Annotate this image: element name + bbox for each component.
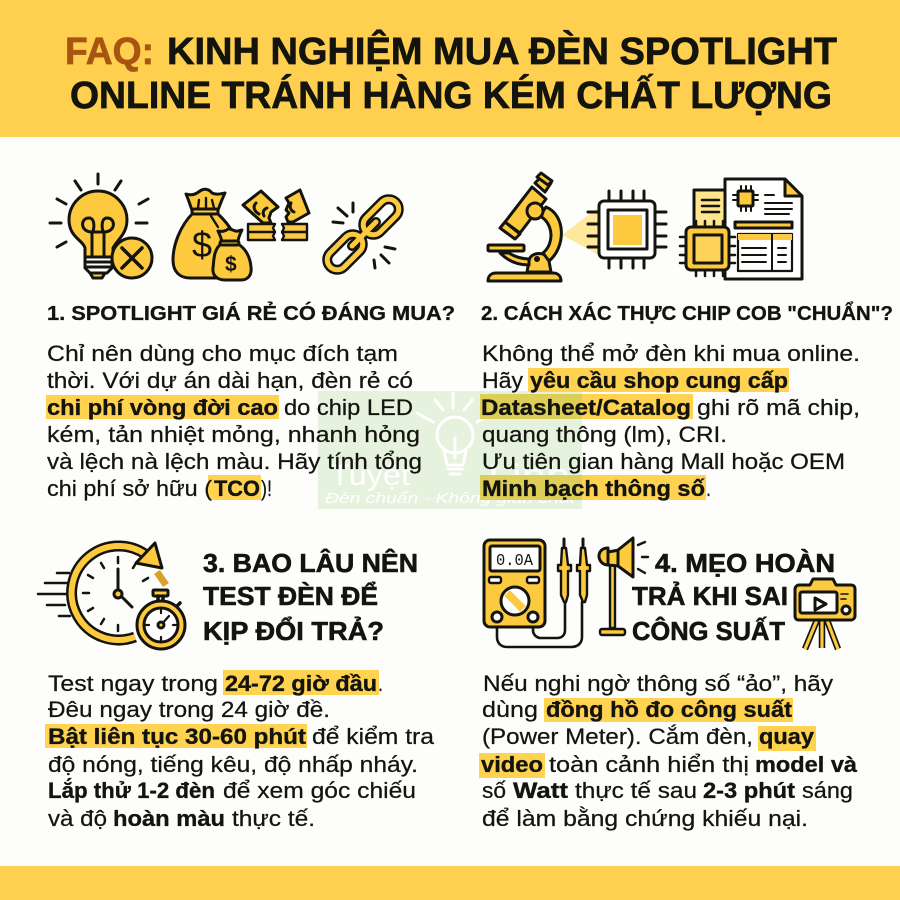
icon: broken light bulb: [50, 174, 152, 278]
text block: để kiểm tra: [312, 724, 435, 749]
watermark: Tuyệt: [330, 459, 411, 492]
heading: 3. BAO LÂU NÊN: [203, 548, 418, 578]
text block: TCO: [214, 476, 260, 501]
title banner: KINH NGHIỆM MUA ĐÈN SPOTLIGHT: [167, 29, 837, 73]
watermark: [318, 391, 582, 509]
text block: .: [706, 476, 711, 501]
heading: KỊP ĐỔI TRẢ?: [203, 616, 384, 646]
heading: CÔNG SUẤT: [632, 616, 785, 646]
title banner: ONLINE TRÁNH HÀNG KÉM CHẤT LƯỢNG: [70, 73, 832, 117]
text block: Nếu nghi ngờ thông số “ảo”, hãy: [483, 671, 833, 696]
heading: 1. SPOTLIGHT GIÁ RẺ CÓ ĐÁNG MUA?: [47, 301, 455, 325]
text block: model và: [755, 752, 858, 777]
heading: [203, 548, 418, 646]
text block: Datasheet/Catalog: [481, 395, 691, 420]
panel: question 2: [480, 173, 893, 501]
icon: microscope: [488, 173, 599, 281]
text block: 2-3 phút: [703, 778, 796, 803]
text block: dùng: [482, 697, 538, 722]
text block: thời. Với dự án dài hạn, đèn rẻ có: [47, 368, 413, 393]
text block: do chip LED: [284, 395, 413, 420]
icon: money bags and torn bills: $: [225, 253, 237, 276]
text block: [479, 671, 858, 831]
heading: [632, 548, 835, 646]
text block: sáng: [802, 778, 853, 803]
icon: multimeter with probes: [484, 539, 590, 647]
text block: (Power Meter). Cắm đèn,: [482, 724, 753, 749]
text block: chi phí vòng đời cao: [47, 395, 278, 420]
text block: kém, tản nhiệt mỏng, nhanh hỏng: [47, 422, 420, 447]
text block: số: [482, 778, 506, 803]
text block: hoàn màu: [113, 806, 225, 831]
panel: question 1: [46, 174, 455, 501]
text block: quay: [759, 724, 815, 749]
watermark: Linh: [488, 459, 570, 492]
text block: .: [378, 671, 383, 696]
title banner: FAQ:: [65, 31, 154, 73]
heading: TRẢ KHI SAI: [632, 581, 788, 611]
text block: chi phí sở hữu (: [47, 476, 213, 501]
icon: chip: [588, 191, 666, 268]
heading: 2. CÁCH XÁC THỰC CHIP COB "CHUẨN"?: [481, 302, 893, 325]
text block: và độ: [48, 806, 107, 831]
footer band: [0, 866, 900, 900]
text block: đồng hồ đo công suất: [546, 697, 793, 722]
icon: broken chain: [323, 195, 403, 274]
heading: 4. MẸO HOÀN: [655, 548, 835, 578]
text block: quang thông (lm), CRI.: [482, 422, 727, 447]
text block: yêu cầu shop cung cấp: [530, 368, 788, 393]
text block: để làm bằng chứng khiếu nại.: [482, 806, 808, 831]
panel: question 3: [38, 543, 435, 831]
text block: Watt: [513, 778, 569, 803]
text block: Lắp thử 1-2 đèn: [48, 778, 215, 803]
icon: datasheet and chip: [680, 179, 802, 279]
text block: Hãy: [482, 368, 523, 393]
icon: money bags and torn bills: [173, 189, 309, 280]
icon: video camera on tripod: [795, 579, 855, 649]
panel: question 4: [479, 538, 858, 831]
text block: độ nóng, tiếng kêu, độ nhấp nháy.: [48, 752, 418, 777]
text block: thực tế.: [232, 806, 315, 831]
text block: Chỉ nên dùng cho mục đích tạm: [47, 341, 398, 366]
text block: và lệch nà lệch màu. Hãy tính tổng: [47, 449, 422, 474]
watermark: Đèn chuẩn - Không gian chất: [325, 490, 576, 507]
icon: multimeter with probes: 0.0A: [496, 552, 534, 571]
text block: Bật liên tục 30-60 phút: [48, 724, 307, 749]
text block: video: [481, 752, 543, 777]
text block: [480, 341, 860, 501]
text block: [45, 670, 435, 831]
text block: Minh bạch thông số: [482, 476, 705, 501]
text block: )!: [261, 476, 272, 501]
text block: Test ngay trong: [48, 671, 218, 696]
text block: Ưu tiên gian hàng Mall hoặc OEM: [482, 449, 845, 474]
text block: ghi rõ mã chip,: [697, 395, 860, 420]
text block: Không thể mở đèn khi mua online.: [482, 341, 860, 366]
icon: clock with stopwatch: [38, 543, 185, 649]
icon: money bags and torn bills: $: [192, 224, 212, 265]
text block: toàn cảnh hiển thị: [549, 752, 749, 777]
icon: spotlight lamp: [599, 538, 648, 635]
text block: để xem góc chiếu: [223, 778, 416, 803]
text block: [46, 341, 422, 501]
text block: 24-72 giờ đầu: [225, 671, 377, 696]
heading: TEST ĐÈN ĐỂ: [203, 581, 378, 611]
text block: thực tế sau: [575, 778, 697, 803]
text block: Đêu ngay trong 24 giờ đề.: [48, 697, 330, 722]
title banner: [0, 0, 900, 137]
